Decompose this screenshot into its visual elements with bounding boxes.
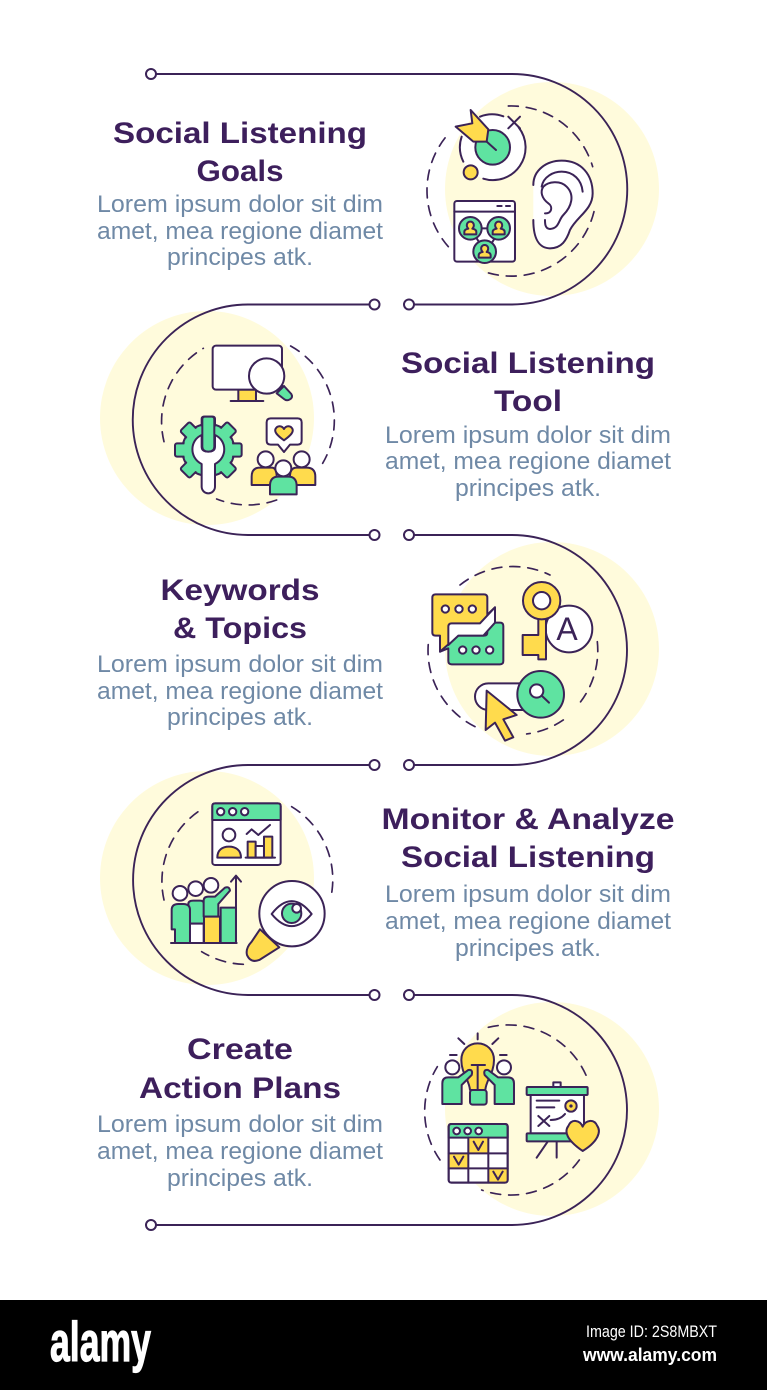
icon: ear xyxy=(533,161,593,248)
icon: calendar checklist xyxy=(449,1124,508,1183)
image id: Image ID: 2S8MBXT xyxy=(586,1322,717,1341)
icon: audience window xyxy=(454,201,515,263)
connector end dot xyxy=(146,1220,156,1230)
icon: key with letter xyxy=(523,582,592,659)
icon: target xyxy=(456,110,526,180)
description: amet, mea regione diamet xyxy=(385,908,671,935)
description: principes atk. xyxy=(167,244,313,271)
connector bottom dot xyxy=(370,530,380,540)
description: amet, mea regione diamet xyxy=(385,448,671,475)
description: amet, mea regione diamet xyxy=(97,1138,383,1165)
dashed ring xyxy=(162,807,333,964)
heading: Create xyxy=(187,1033,293,1066)
connector bottom dot xyxy=(370,990,380,1000)
icon: chat bubbles xyxy=(432,594,503,664)
description: Lorem ipsum dolor sit dim xyxy=(385,422,671,449)
panel: monitor and analyze xyxy=(100,760,674,1000)
description: principes atk. xyxy=(455,475,601,502)
background circle xyxy=(445,542,659,756)
description: Lorem ipsum dolor sit dim xyxy=(97,1111,383,1138)
heading: Action Plans xyxy=(139,1072,341,1105)
icon group: monitor, gear and community xyxy=(162,346,334,505)
description: Lorem ipsum dolor sit dim xyxy=(97,191,383,218)
dashed ring xyxy=(427,106,594,276)
icon: eye magnifier xyxy=(247,881,325,961)
panel: social listening goals xyxy=(97,69,659,310)
connector line xyxy=(156,995,627,1225)
heading: Keywords xyxy=(160,574,320,607)
dashed ring xyxy=(162,346,334,505)
connector top dot xyxy=(370,300,380,310)
connector line xyxy=(133,765,369,995)
heading: Tool xyxy=(494,385,562,418)
background circle xyxy=(100,311,314,525)
panel: create action plans xyxy=(97,990,659,1230)
background circle xyxy=(445,1002,659,1216)
connector end dot xyxy=(404,300,414,310)
icon group: chat, key and search xyxy=(428,566,598,741)
icon group: idea, calendar and presentation xyxy=(425,1025,599,1195)
icon: team growth chart xyxy=(171,876,241,943)
icon: key with letter: A xyxy=(556,611,578,647)
icon: monitor with magnifier xyxy=(213,346,292,401)
heading: Social Listening xyxy=(113,117,367,150)
description: amet, mea regione diamet xyxy=(97,678,383,705)
footer bar xyxy=(0,1300,767,1390)
watermark logo: alamy xyxy=(50,1310,151,1373)
background circle xyxy=(445,82,659,296)
connector top dot xyxy=(370,760,380,770)
icon group: target, ear and audience window xyxy=(427,106,594,276)
icon: analytics dashboard xyxy=(212,803,281,865)
dashed ring xyxy=(425,1025,587,1195)
panel: keywords and topics xyxy=(97,530,659,770)
heading: Goals xyxy=(196,155,284,188)
connector start dot xyxy=(146,69,156,79)
connector line xyxy=(133,304,369,535)
description: principes atk. xyxy=(455,935,601,962)
description: Lorem ipsum dolor sit dim xyxy=(385,881,671,908)
heading: & Topics xyxy=(173,612,307,645)
description: principes atk. xyxy=(167,704,313,731)
description: principes atk. xyxy=(167,1165,313,1192)
icon: presentation board with heart xyxy=(527,1082,599,1158)
connector top dot xyxy=(404,530,414,540)
dashed ring xyxy=(428,566,598,734)
connector top dot xyxy=(404,990,414,1000)
background circle xyxy=(100,771,314,985)
website: www.alamy.com xyxy=(582,1345,717,1365)
icon: team with light bulb xyxy=(442,1033,514,1105)
icon: search with cursor xyxy=(475,671,564,741)
description: Lorem ipsum dolor sit dim xyxy=(97,651,383,678)
connector line xyxy=(414,535,627,765)
panel: social listening tool xyxy=(100,300,671,540)
description: amet, mea regione diamet xyxy=(97,218,383,245)
connector bottom dot xyxy=(404,760,414,770)
icon group: dashboard, team growth and eye xyxy=(162,803,333,964)
heading: Social Listening xyxy=(401,347,655,380)
icon: gear with wrench xyxy=(175,417,242,493)
icon: community with heart bubble xyxy=(252,418,315,494)
heading: Social Listening xyxy=(401,841,655,874)
heading: Monitor & Analyze xyxy=(382,803,674,836)
connector line xyxy=(156,74,627,304)
